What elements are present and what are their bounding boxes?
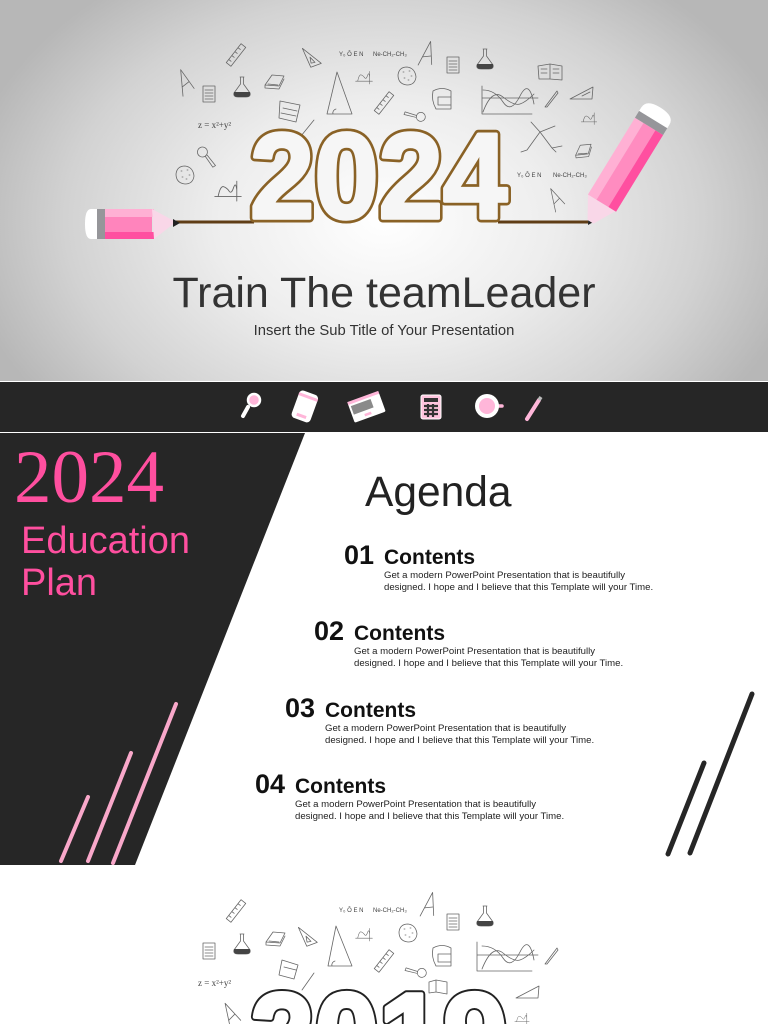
doodles bbox=[198, 891, 558, 1024]
heading: 2024: 2024 bbox=[14, 436, 164, 519]
icon: laptop bbox=[347, 391, 386, 423]
decorative pink lines bbox=[58, 702, 178, 866]
agenda item 04: Contents bbox=[295, 775, 386, 798]
title: Train The teamLeader bbox=[172, 269, 596, 317]
icon strip bbox=[0, 382, 768, 432]
icon: cup bbox=[475, 394, 502, 418]
doodles: Y₀ Ō E N bbox=[339, 51, 364, 58]
heading: Education Plan: Education bbox=[21, 520, 190, 562]
agenda item 02: designed. I hope and I believe that this Template will your Time. bbox=[354, 658, 623, 669]
illustration: 2024 pencil drawing bbox=[85, 41, 671, 245]
doodles: z = x²+y² bbox=[198, 978, 231, 988]
gold wire line bbox=[176, 220, 588, 224]
agenda item 03: Get a modern PowerPoint Presentation that is beautifully bbox=[325, 723, 566, 734]
right pencil bbox=[574, 99, 675, 234]
2024 outlined numerals: 2024 bbox=[250, 108, 507, 245]
agenda item 03: Contents bbox=[325, 699, 416, 722]
doodles: Ne-CH₂-CH₃ bbox=[553, 173, 587, 179]
agenda item 01: Get a modern PowerPoint Presentation that is beautifully bbox=[384, 570, 625, 581]
2024 outlined numerals: 2024 bbox=[250, 108, 507, 245]
doodles: Y₀ Ō E N bbox=[517, 172, 542, 179]
agenda item 01: designed. I hope and I believe that this Template will your Time. bbox=[384, 582, 653, 593]
agenda item 04 bbox=[255, 769, 564, 822]
icon: phone bbox=[290, 389, 319, 424]
panel: left dark education plan bbox=[0, 433, 305, 865]
agenda item 03 bbox=[285, 693, 594, 746]
illustration: 2019 partial bbox=[198, 892, 558, 1024]
heading: Education Plan bbox=[21, 520, 190, 604]
agenda item 02: 02 bbox=[314, 616, 344, 646]
agenda item 03: designed. I hope and I believe that this Template will your Time. bbox=[325, 735, 594, 746]
decorative dark lines bbox=[666, 692, 754, 856]
agenda item 01: Contents bbox=[384, 546, 475, 569]
doodles: Ne-CH₂-CH₃ bbox=[373, 908, 407, 914]
agenda item 01 bbox=[344, 540, 653, 593]
icon: magnifier bbox=[243, 394, 260, 416]
agenda item 04: designed. I hope and I believe that this Template will your Time. bbox=[295, 811, 564, 822]
doodles: Y₀ Ō E N bbox=[339, 907, 364, 914]
agenda item 01: 01 bbox=[344, 540, 374, 570]
subtitle: Insert the Sub Title of Your Presentation bbox=[254, 323, 514, 339]
agenda item 02: Get a modern PowerPoint Presentation that is beautifully bbox=[354, 646, 595, 657]
agenda item 04: 04 bbox=[255, 769, 285, 799]
agenda item 03: 03 bbox=[285, 693, 315, 723]
icon: calculator bbox=[421, 395, 441, 419]
agenda item 04: Get a modern PowerPoint Presentation that is beautifully bbox=[295, 799, 536, 810]
doodles: z = x²+y² bbox=[198, 120, 231, 130]
heading: Education Plan: Plan bbox=[21, 562, 97, 604]
left pencil bbox=[85, 209, 180, 239]
doodles: Ne-CH₂-CH₃ bbox=[373, 52, 407, 58]
doodles bbox=[175, 40, 597, 212]
agenda item 02 bbox=[314, 616, 623, 669]
icon: pen bbox=[527, 397, 541, 419]
panel: cover background bbox=[0, 0, 768, 381]
agenda item 02: Contents bbox=[354, 622, 445, 645]
heading: Agenda: Agenda bbox=[365, 469, 512, 516]
